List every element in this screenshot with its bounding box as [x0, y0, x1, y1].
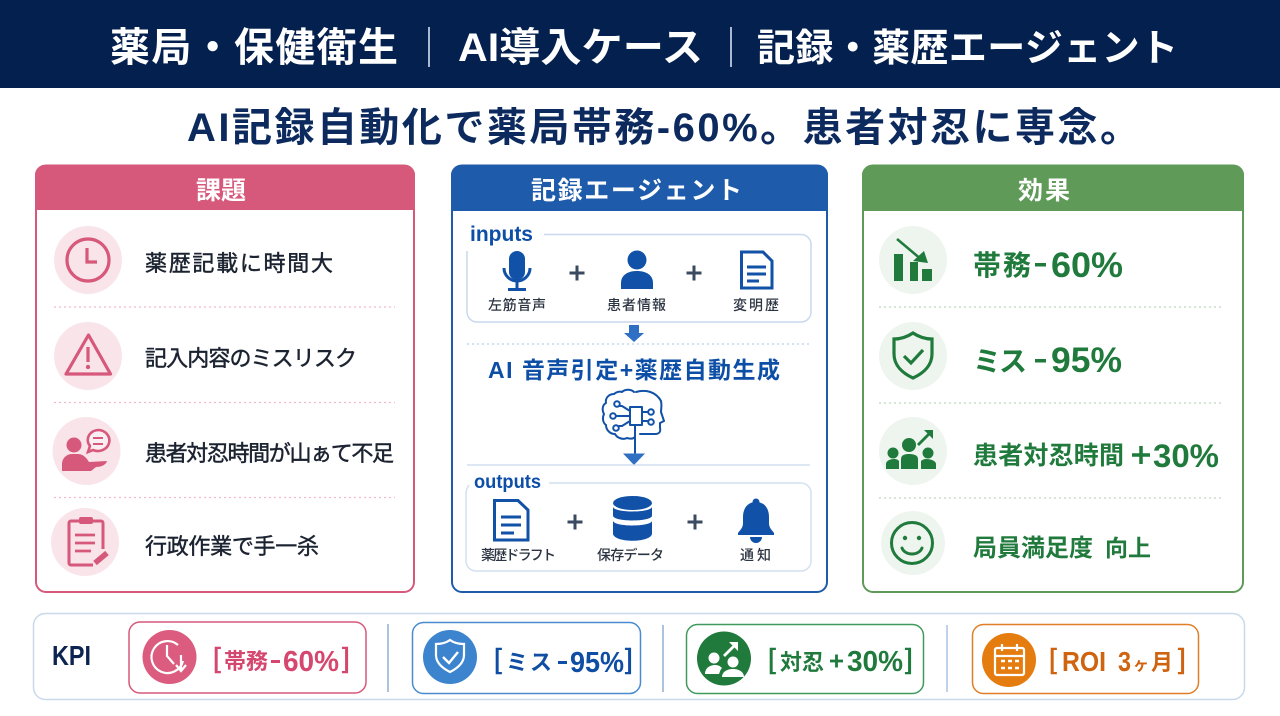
KPI value: ミス: [506, 645, 552, 677]
KPI value: 月: [1151, 645, 1173, 677]
KPI value: 対忍: [780, 645, 824, 677]
KPI card: ミス: [412, 622, 640, 694]
header title part 1: 薬局・保健衛生: [110, 15, 398, 73]
icon: bell: [738, 498, 774, 543]
outputs box: [466, 483, 811, 571]
icon: falling bars: [879, 226, 947, 294]
KPI label: KPI: [52, 640, 91, 671]
panel heading: 効果: 効果: [1018, 171, 1070, 207]
icon: shield check: [423, 630, 477, 684]
effect text 2: 95%: [1051, 341, 1122, 380]
icon: smile: [881, 511, 945, 575]
effect text 3: 患者対忍時間: [973, 436, 1124, 472]
effect text 2: ミス: [973, 340, 1027, 380]
arrow down: [624, 325, 644, 342]
icon: patient consult: [52, 417, 120, 485]
icon: AI brain: [603, 390, 664, 453]
KPI value: [: [768, 643, 776, 674]
KPI value: 帯務: [224, 644, 268, 676]
KPI card: 対忍: [686, 624, 924, 694]
effect text 1: 帯務: [973, 244, 1031, 284]
panel: 記録エージェント: [451, 165, 828, 592]
icon: shield check: [879, 322, 947, 390]
input label 3: 変明歴: [733, 295, 779, 315]
KPI value: [: [494, 643, 502, 674]
icon: clock down: [142, 630, 196, 684]
input label 2: 患者情報: [607, 295, 666, 315]
plus: [570, 266, 584, 280]
KPI strip: [34, 614, 1244, 700]
icon: people growth: [879, 417, 947, 485]
KPI value: 95%: [570, 647, 624, 679]
output label 3: 通知: [740, 545, 771, 565]
issue text 3: 患者対忍時間が山ぁて不足: [145, 436, 394, 468]
KPI value: [: [213, 642, 221, 673]
output label 2: 保存データ: [597, 545, 664, 565]
KPI card: ROI: [972, 624, 1198, 694]
effect text 4: 局員満足度: [973, 528, 1093, 563]
icon: calendar: [982, 633, 1036, 687]
icon: warning: [54, 322, 122, 390]
KPI value: [213, 642, 350, 678]
effect text 3: [973, 436, 1219, 474]
issue text 2: 記入内容のミスリスク: [145, 341, 357, 373]
outputs label: outputs: [474, 472, 541, 493]
KPI value: ]: [625, 643, 633, 674]
icon: person: [621, 250, 653, 289]
effect text 1: 60%: [1051, 246, 1123, 285]
KPI value: [1049, 643, 1186, 677]
header title part 3: 記録・薬歴エージェント: [757, 17, 1178, 72]
icon: clock: [54, 226, 122, 294]
icon: draft document: [494, 500, 528, 540]
panel heading: 課題: 課題: [196, 171, 246, 207]
KPI value: 3: [1118, 646, 1131, 677]
KPI value: [494, 643, 633, 679]
KPI value: 30%: [847, 646, 903, 678]
KPI value: ]: [1178, 643, 1186, 674]
KPI value: ROI: [1062, 646, 1106, 677]
issue text 1: 薬歴記載に時間大: [145, 246, 333, 278]
header title part 2: AI導入ケース: [458, 26, 703, 70]
icon: clipboard: [51, 508, 119, 576]
KPI value: ]: [905, 643, 913, 674]
panel: 効果: [862, 165, 1244, 592]
KPI card: 帯務: [129, 622, 366, 693]
inputs box: [467, 234, 811, 322]
plus: [686, 266, 702, 280]
headline: AI記録自動化で薬局帯務-60%。患者対忍に専念。: [187, 106, 1140, 150]
effect text 4: 向上: [1105, 529, 1151, 563]
effect text 3: 30%: [1153, 438, 1219, 474]
inputs label: inputs: [470, 223, 533, 246]
issue text 4: 行政作業で手一杀: [145, 529, 319, 561]
effect text 2: [973, 340, 1122, 380]
KPI value: 60%: [283, 646, 339, 678]
KPI value: ヶ: [1133, 651, 1149, 675]
effect text 1: [973, 244, 1123, 285]
panel heading: 記録エージェント: 記録エージェント: [531, 171, 742, 207]
KPI value: [: [1049, 643, 1057, 674]
icon: people growth: [697, 632, 751, 686]
process label: AI 音声引定+薬歴自動生成: [488, 357, 780, 383]
output label 1: 薬歴ドラフト: [481, 545, 556, 565]
icon: document: [742, 252, 772, 288]
effect text 4: [973, 528, 1151, 563]
plus: [568, 514, 582, 530]
input label 1: 左筋音声: [488, 295, 546, 315]
panel: 課題: [35, 165, 415, 592]
icon: database: [613, 496, 652, 541]
KPI value: [768, 643, 913, 678]
icon: microphone: [504, 251, 530, 290]
KPI value: ]: [342, 642, 350, 673]
header band: [0, 0, 1280, 88]
plus: [688, 514, 702, 530]
arrow down: [623, 454, 645, 465]
